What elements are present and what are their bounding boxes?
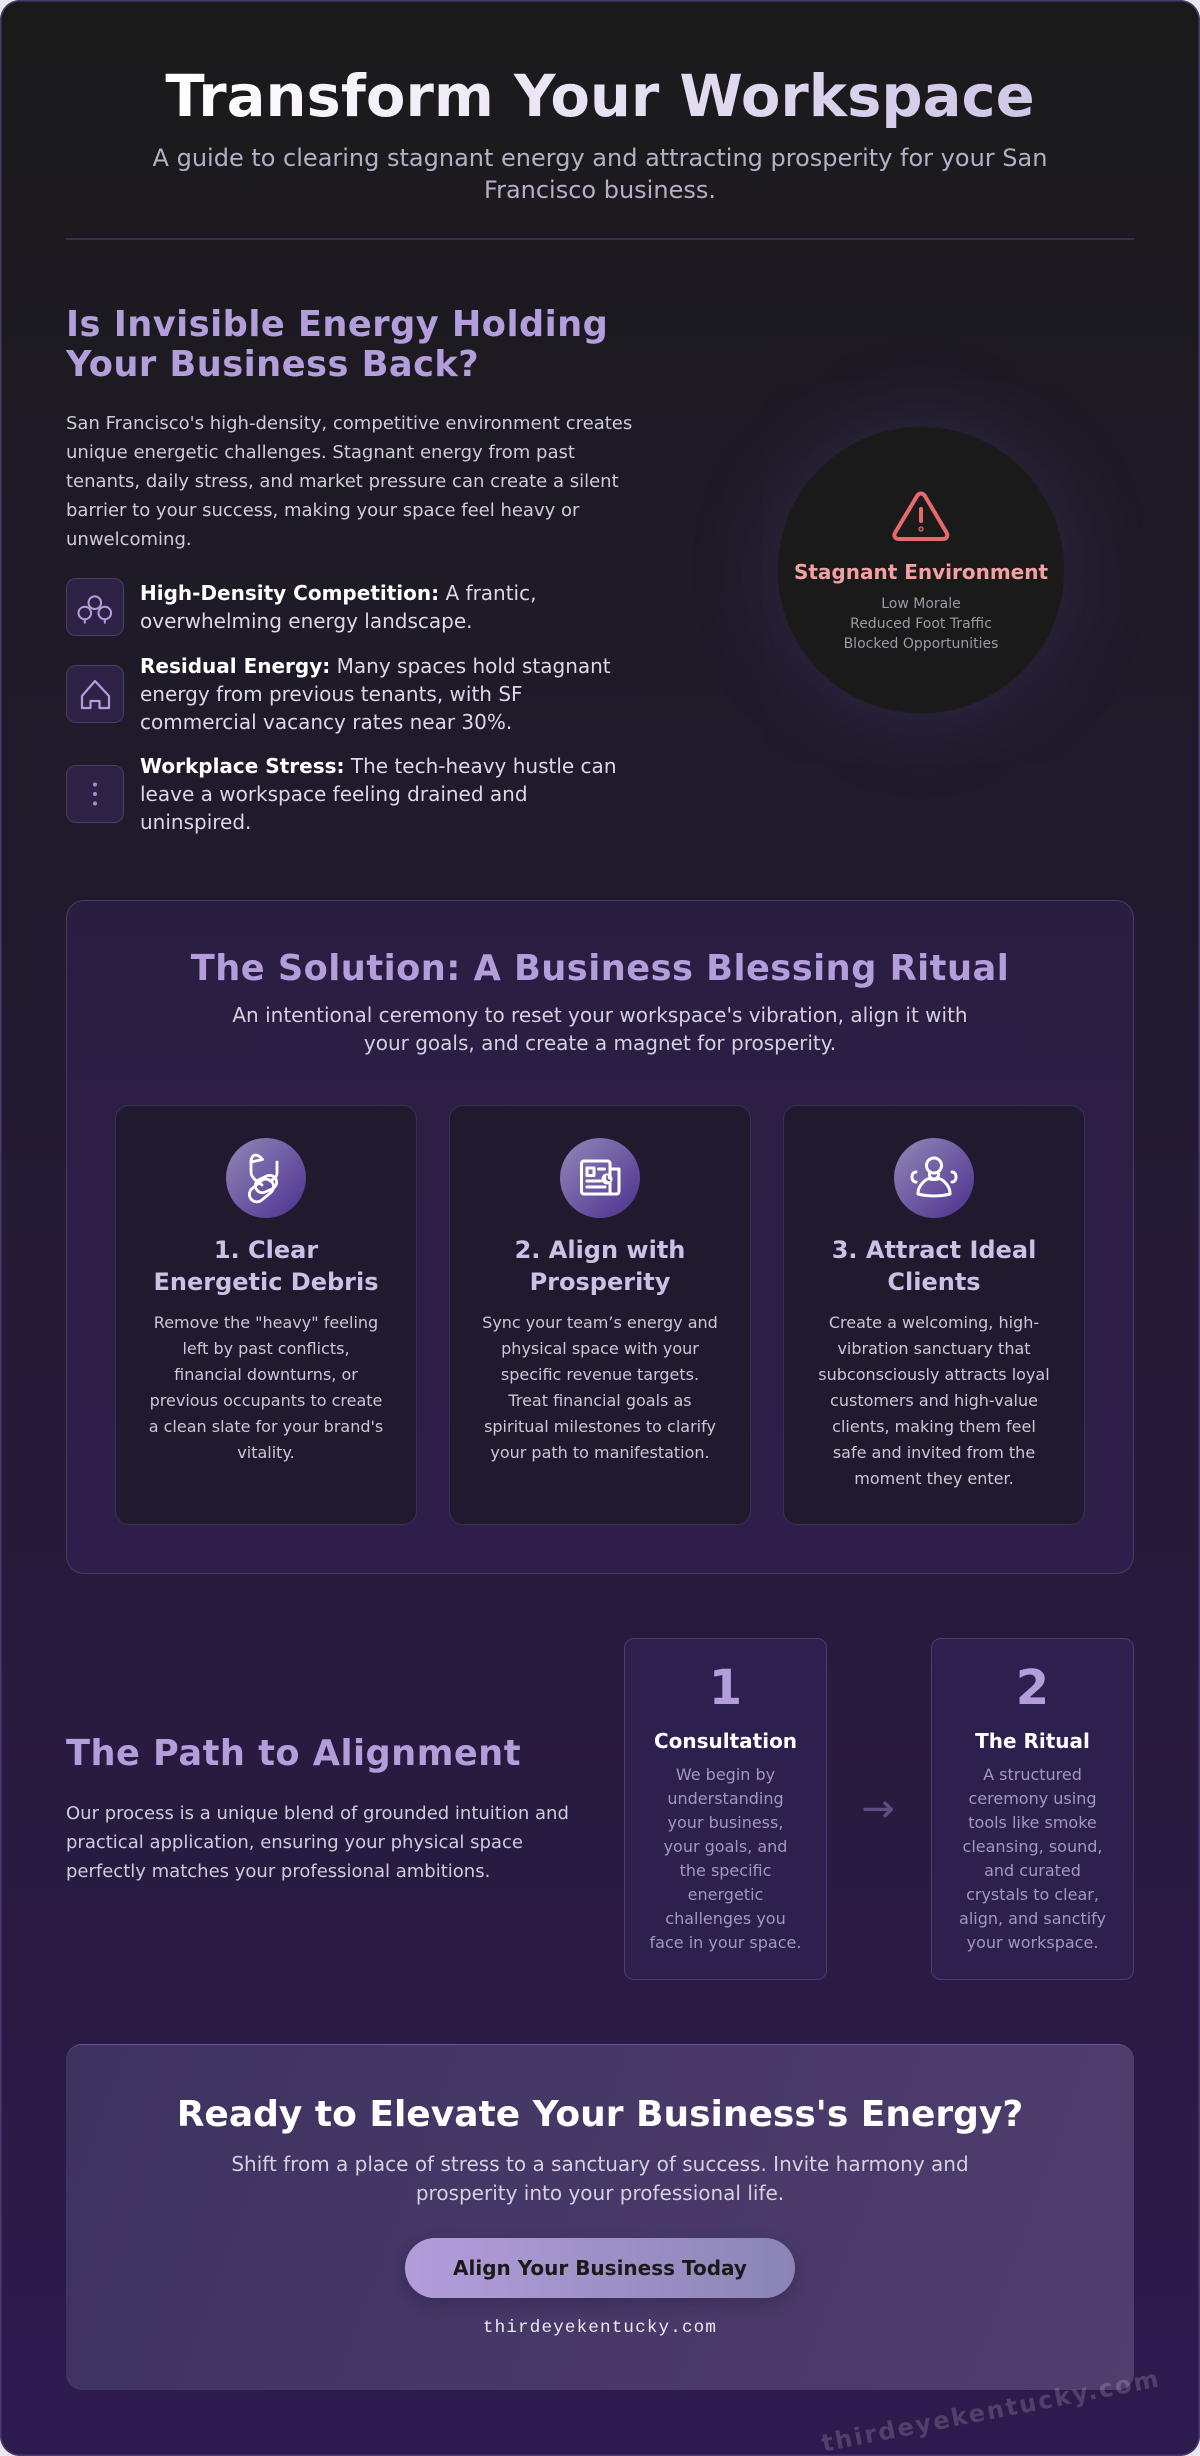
item text: overwhelming energy landscape. — [140, 609, 473, 633]
problem item 3 — [66, 754, 616, 834]
icon: house — [66, 665, 124, 723]
circle list: Reduced Foot Traffic — [850, 616, 992, 632]
step text: cleansing, sound, — [963, 1837, 1102, 1856]
path paragraph: perfectly matches your professional ambitions. — [66, 1861, 490, 1882]
card text: vitality. — [237, 1443, 295, 1462]
item text — [140, 581, 536, 633]
cta button: Align Your Business Today — [453, 2256, 747, 2280]
card text: Treat financial goals as — [508, 1391, 692, 1410]
card text: physical space with your — [501, 1339, 699, 1358]
card heading: Clients — [887, 1268, 981, 1296]
card text: safe and invited from the — [833, 1443, 1035, 1462]
cta text: Shift from a place of stress to a sanctuary of success. Invite harmony and — [231, 2152, 969, 2176]
item text: High-Density Competition: A frantic, — [140, 581, 536, 605]
icon: warning triangle — [892, 492, 950, 541]
step text: align, and sanctify — [959, 1909, 1106, 1928]
problem paragraph — [66, 413, 632, 550]
icon: stethoscope — [226, 1138, 306, 1218]
card heading — [832, 1236, 1036, 1296]
step number: 1 — [709, 1660, 742, 1716]
card text: financial downturns, or — [174, 1365, 358, 1384]
card text — [818, 1313, 1050, 1488]
path paragraph: Our process is a unique blend of grounded intuition and — [66, 1803, 569, 1824]
step number: 2 — [1016, 1660, 1049, 1716]
step text: We begin by — [676, 1765, 775, 1784]
step text: face in your space. — [650, 1933, 801, 1952]
cta text: prosperity into your professional life. — [416, 2181, 784, 2205]
heading: path: The Path to Alignment — [66, 1733, 521, 1774]
card text: Remove the "heavy" feeling — [154, 1313, 378, 1332]
item text — [140, 754, 616, 834]
arrow: → — [861, 1786, 895, 1832]
problem paragraph: unwelcoming. — [66, 529, 192, 550]
website url: thirdeyekentucky.com — [483, 2318, 717, 2338]
card text: a clean slate for your brand's — [149, 1417, 383, 1436]
stagnant environment circle — [777, 426, 1065, 714]
solution heading: The Solution: A Business Blessing Ritual — [191, 948, 1009, 989]
solution subtitle: your goals, and create a magnet for prosperity. — [364, 1031, 836, 1055]
item text: commercial vacancy rates near 30%. — [140, 710, 512, 734]
card text: moment they enter. — [854, 1469, 1014, 1488]
item text: energy from previous tenants, with SF — [140, 682, 523, 706]
step title: Consultation — [654, 1729, 797, 1753]
cta button — [405, 2238, 795, 2298]
card heading: 1. Clear — [214, 1236, 318, 1264]
problem paragraph: unique energetic challenges. Stagnant energy from past — [66, 442, 575, 463]
solution subtitle — [232, 1003, 968, 1055]
subtitle — [152, 144, 1047, 204]
card heading — [515, 1236, 685, 1296]
heading: problem: Is Invisible Energy Holding — [66, 304, 608, 345]
card text: your path to manifestation. — [490, 1443, 710, 1462]
title: Transform Your Workspace — [165, 63, 1035, 130]
card text: previous occupants to create — [150, 1391, 382, 1410]
card heading: Energetic Debris — [153, 1268, 379, 1296]
card heading: Prosperity — [530, 1268, 670, 1296]
problem paragraph: San Francisco's high-density, competitive environment creates — [66, 413, 632, 434]
path paragraph: practical application, ensuring your physical space — [66, 1832, 523, 1853]
step text: your workspace. — [967, 1933, 1098, 1952]
step text — [959, 1765, 1106, 1952]
panel: call to action — [66, 2044, 1134, 2390]
step text: the specific — [680, 1861, 771, 1880]
card heading: 2. Align with — [515, 1236, 685, 1264]
icon: three dots — [66, 765, 124, 823]
card text: spiritual milestones to clarify — [484, 1417, 716, 1436]
card text: Create a welcoming, high- — [829, 1313, 1039, 1332]
step 1 — [624, 1638, 827, 1980]
step text: crystals to clear, — [966, 1885, 1099, 1904]
step text: A structured — [983, 1765, 1082, 1784]
step text: your goals, and — [664, 1837, 787, 1856]
panel: solution — [66, 900, 1134, 1574]
step text: and curated — [984, 1861, 1081, 1880]
cta text — [231, 2152, 969, 2205]
subtitle: Francisco business. — [484, 176, 716, 204]
item text: Workplace Stress: The tech-heavy hustle can — [140, 754, 616, 778]
card heading: 3. Attract Ideal — [832, 1236, 1036, 1264]
heading: problem — [66, 304, 608, 385]
path paragraph — [66, 1803, 569, 1882]
step text — [650, 1765, 801, 1952]
subtitle: A guide to clearing stagnant energy and attracting prosperity for your San — [153, 144, 1047, 172]
step title: The Ritual — [975, 1729, 1090, 1753]
icon: newspaper — [560, 1138, 640, 1218]
cta heading: Ready to Elevate Your Business's Energy? — [177, 2094, 1023, 2135]
step text: your business, — [668, 1813, 783, 1832]
step text: tools like smoke — [968, 1813, 1097, 1832]
card 3 — [783, 1105, 1085, 1525]
card text: customers and high-value — [830, 1391, 1038, 1410]
problem item 2 — [66, 654, 611, 734]
step text: understanding — [667, 1789, 784, 1808]
icon: three circles — [66, 578, 124, 636]
card heading — [153, 1236, 379, 1296]
item text: uninspired. — [140, 810, 251, 834]
icon: person — [894, 1138, 974, 1218]
step text: challenges you — [665, 1909, 786, 1928]
problem item 1 — [66, 578, 536, 636]
circle list: Blocked Opportunities — [844, 636, 998, 652]
circle heading: Stagnant Environment — [794, 560, 1048, 584]
card text: vibration sanctuary that — [837, 1339, 1031, 1358]
card text: specific revenue targets. — [501, 1365, 699, 1384]
item text: Residual Energy: Many spaces hold stagnant — [140, 654, 611, 678]
card text — [149, 1313, 383, 1462]
circle list: Low Morale — [881, 596, 961, 612]
card text: clients, making them feel — [832, 1417, 1036, 1436]
card 1 — [115, 1105, 417, 1525]
step 2 — [931, 1638, 1134, 1980]
heading: problem: Your Business Back? — [66, 344, 479, 385]
card 2 — [449, 1105, 751, 1525]
solution subtitle: An intentional ceremony to reset your workspace's vibration, align it with — [232, 1003, 968, 1027]
card text: left by past conflicts, — [182, 1339, 350, 1358]
card text — [482, 1313, 718, 1462]
item text — [140, 654, 611, 734]
problem paragraph: barrier to your success, making your space feel heavy or — [66, 500, 579, 521]
problem paragraph: tenants, daily stress, and market pressure can create a silent — [66, 471, 619, 492]
card text: Sync your team’s energy and — [482, 1313, 718, 1332]
step text: energetic — [688, 1885, 763, 1904]
circle list — [844, 596, 998, 652]
item text: leave a workspace feeling drained and — [140, 782, 528, 806]
watermark: thirdeyekentucky.com — [819, 2364, 1163, 2456]
card text: subconsciously attracts loyal — [818, 1365, 1050, 1384]
step text: ceremony using — [968, 1789, 1096, 1808]
